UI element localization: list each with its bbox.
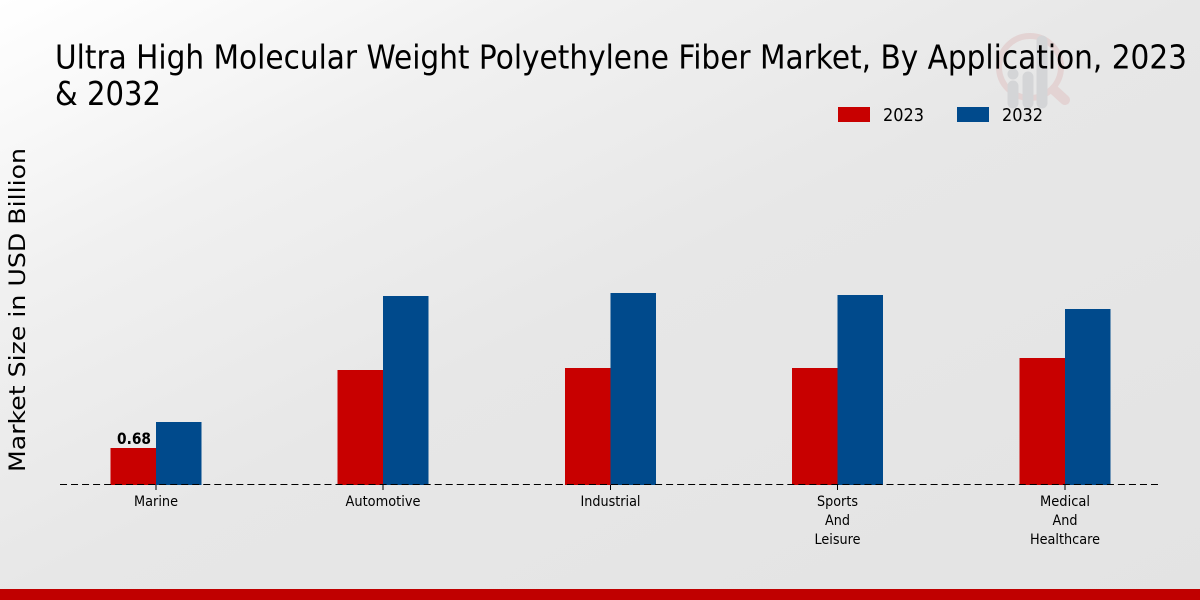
legend item: 2023	[838, 105, 924, 126]
bars: Medical And Healthcare	[1020, 309, 1110, 485]
bars: Marine	[110, 422, 202, 485]
category labels: Industrial	[580, 494, 640, 510]
legend item: 2032: 2032	[1002, 105, 1043, 126]
bars: Industrial	[565, 293, 656, 485]
category labels: Leisure	[814, 532, 861, 548]
title	[55, 38, 1187, 113]
legend item: 2032	[957, 105, 1043, 126]
category labels: Automotive	[346, 494, 421, 510]
category labels: Medical	[1040, 494, 1090, 510]
baseline	[60, 484, 1160, 486]
category labels	[134, 494, 1100, 548]
y axis label: Market Size in USD Billion	[5, 148, 31, 472]
footer bar	[0, 589, 1200, 600]
legend	[838, 105, 1043, 126]
icon: watermark magnifier with bars	[999, 36, 1065, 103]
bars: Automotive	[338, 296, 428, 485]
category labels: Marine	[134, 494, 178, 510]
category labels: Healthcare	[1030, 532, 1100, 548]
data label: 0.68: 0.68	[117, 429, 151, 448]
category labels: And	[825, 513, 850, 529]
legend item: 2023: 2023	[883, 105, 924, 126]
category labels: And	[1052, 513, 1078, 529]
title: & 2032	[55, 74, 161, 113]
bar chart	[60, 293, 1160, 548]
bars: Sports And Leisure	[792, 295, 883, 485]
category labels: Sports	[817, 494, 858, 510]
